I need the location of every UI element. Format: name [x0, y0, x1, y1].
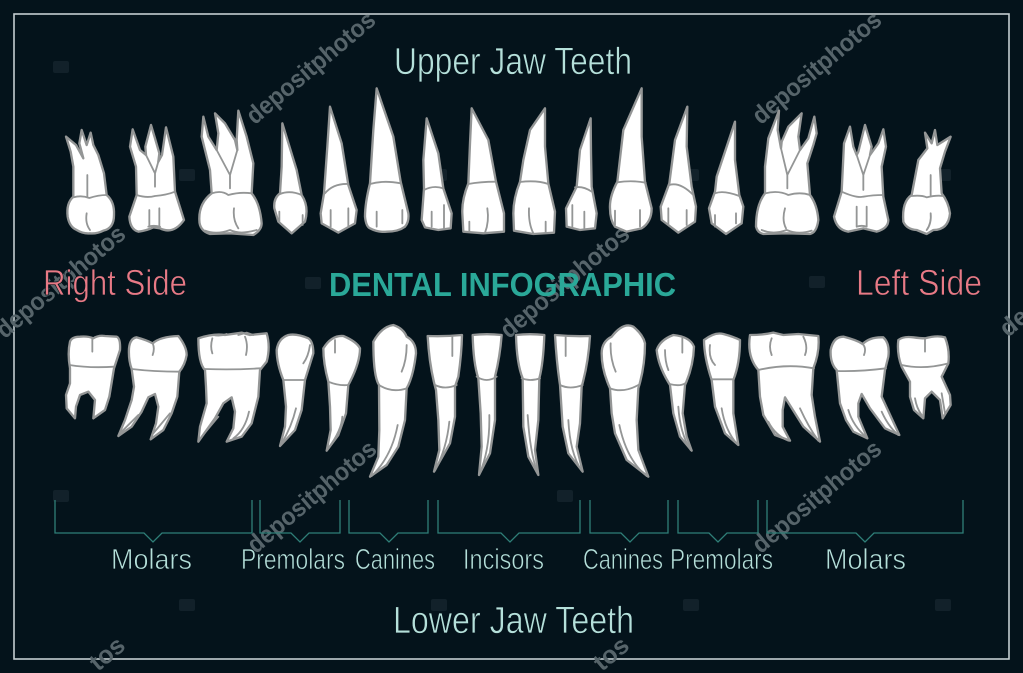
- title: DENTAL INFOGRAPHIC: [329, 266, 676, 303]
- group: premolars, left: Premolars: [670, 544, 773, 576]
- group: canines, right: [349, 500, 435, 576]
- group: incisors: [438, 500, 580, 576]
- camera watermark icons: [53, 61, 951, 611]
- group: premolars, left: [670, 500, 773, 576]
- tooth: upper premolar 1: [274, 123, 307, 233]
- group: molars, right: Molars: [111, 544, 192, 576]
- upper teeth row: [66, 88, 951, 235]
- tooth: upper canine: [365, 88, 409, 232]
- tooth: upper premolar, left 1: [661, 107, 696, 233]
- tooth: lower incisor 1: [428, 335, 462, 472]
- group: canines, left: [583, 500, 668, 576]
- tooth: upper premolar, left 2: [709, 122, 743, 234]
- tooth: upper incisor 4: [566, 118, 597, 230]
- tooth: upper molar, left 3: [903, 130, 951, 234]
- tooth: upper incisor 2: [462, 108, 504, 233]
- tooth: lower premolar, left 2: [704, 333, 740, 445]
- lower teeth, centre: [370, 325, 648, 477]
- tooth: upper canine, left: [610, 88, 652, 232]
- watermarks: depositphotos: [747, 435, 887, 559]
- tooth: upper molar 3: [199, 111, 262, 235]
- upper teeth, centre: [422, 88, 696, 234]
- tooth: lower molar 3: [198, 333, 269, 442]
- watermarks: depositphotos: [495, 220, 635, 344]
- tooth: lower molar, left 1: [749, 333, 820, 442]
- group: molars, left: [767, 500, 963, 576]
- upper teeth, right side: [66, 88, 409, 235]
- heading: lower jaw teeth: Lower Jaw Teeth: [393, 600, 634, 642]
- tooth: lower canine, left: [602, 325, 648, 477]
- tooth: lower incisor 3: [516, 334, 544, 475]
- group: canines, left: Canines: [583, 544, 663, 576]
- group: premolars, right: [241, 500, 345, 576]
- tooth: upper premolar 2: [321, 107, 357, 233]
- tooth: lower premolar 2: [323, 336, 360, 451]
- tooth: lower molar, left 2: [831, 337, 899, 438]
- tooth: lower incisor 2: [473, 334, 502, 475]
- lower teeth, right side: [66, 333, 360, 451]
- upper teeth, left side: [709, 111, 951, 234]
- tooth: upper molar 1: [66, 130, 114, 233]
- watermarks: depositphotos: [747, 6, 887, 130]
- tooth: upper incisor 3: [513, 108, 555, 234]
- tooth: upper molar 2: [129, 125, 184, 232]
- lower teeth row: [66, 325, 951, 477]
- tooth: lower premolar, left 1: [657, 335, 694, 451]
- tooth: upper molar, left 2: [834, 125, 888, 232]
- group: canines, right: Canines: [355, 544, 435, 576]
- heading: upper jaw teeth: Upper Jaw Teeth: [394, 41, 632, 83]
- watermarks: depositphotos: [242, 435, 382, 559]
- tooth: lower canine: [370, 325, 416, 477]
- watermarks: depositphotos: [241, 6, 381, 130]
- brackets and labels: [55, 500, 963, 576]
- group: incisors: Incisors: [463, 544, 544, 576]
- tooth: lower molar 2: [118, 336, 187, 439]
- group: molars, right: [55, 500, 252, 576]
- tooth: lower incisor 4: [555, 335, 590, 472]
- group: premolars, right: Premolars: [241, 544, 345, 576]
- label: left side: Left Side: [856, 262, 982, 303]
- tooth: lower premolar 1: [277, 335, 313, 446]
- lower teeth, left side: [657, 333, 951, 451]
- label: right side: Right Side: [43, 262, 187, 303]
- tooth: upper incisor 1: [422, 118, 452, 230]
- tooth: lower molar 1: [66, 336, 120, 418]
- tooth: lower molar, left 3: [898, 336, 951, 418]
- group: molars, left: Molars: [825, 544, 906, 576]
- tooth: upper molar, left 1: [756, 111, 818, 234]
